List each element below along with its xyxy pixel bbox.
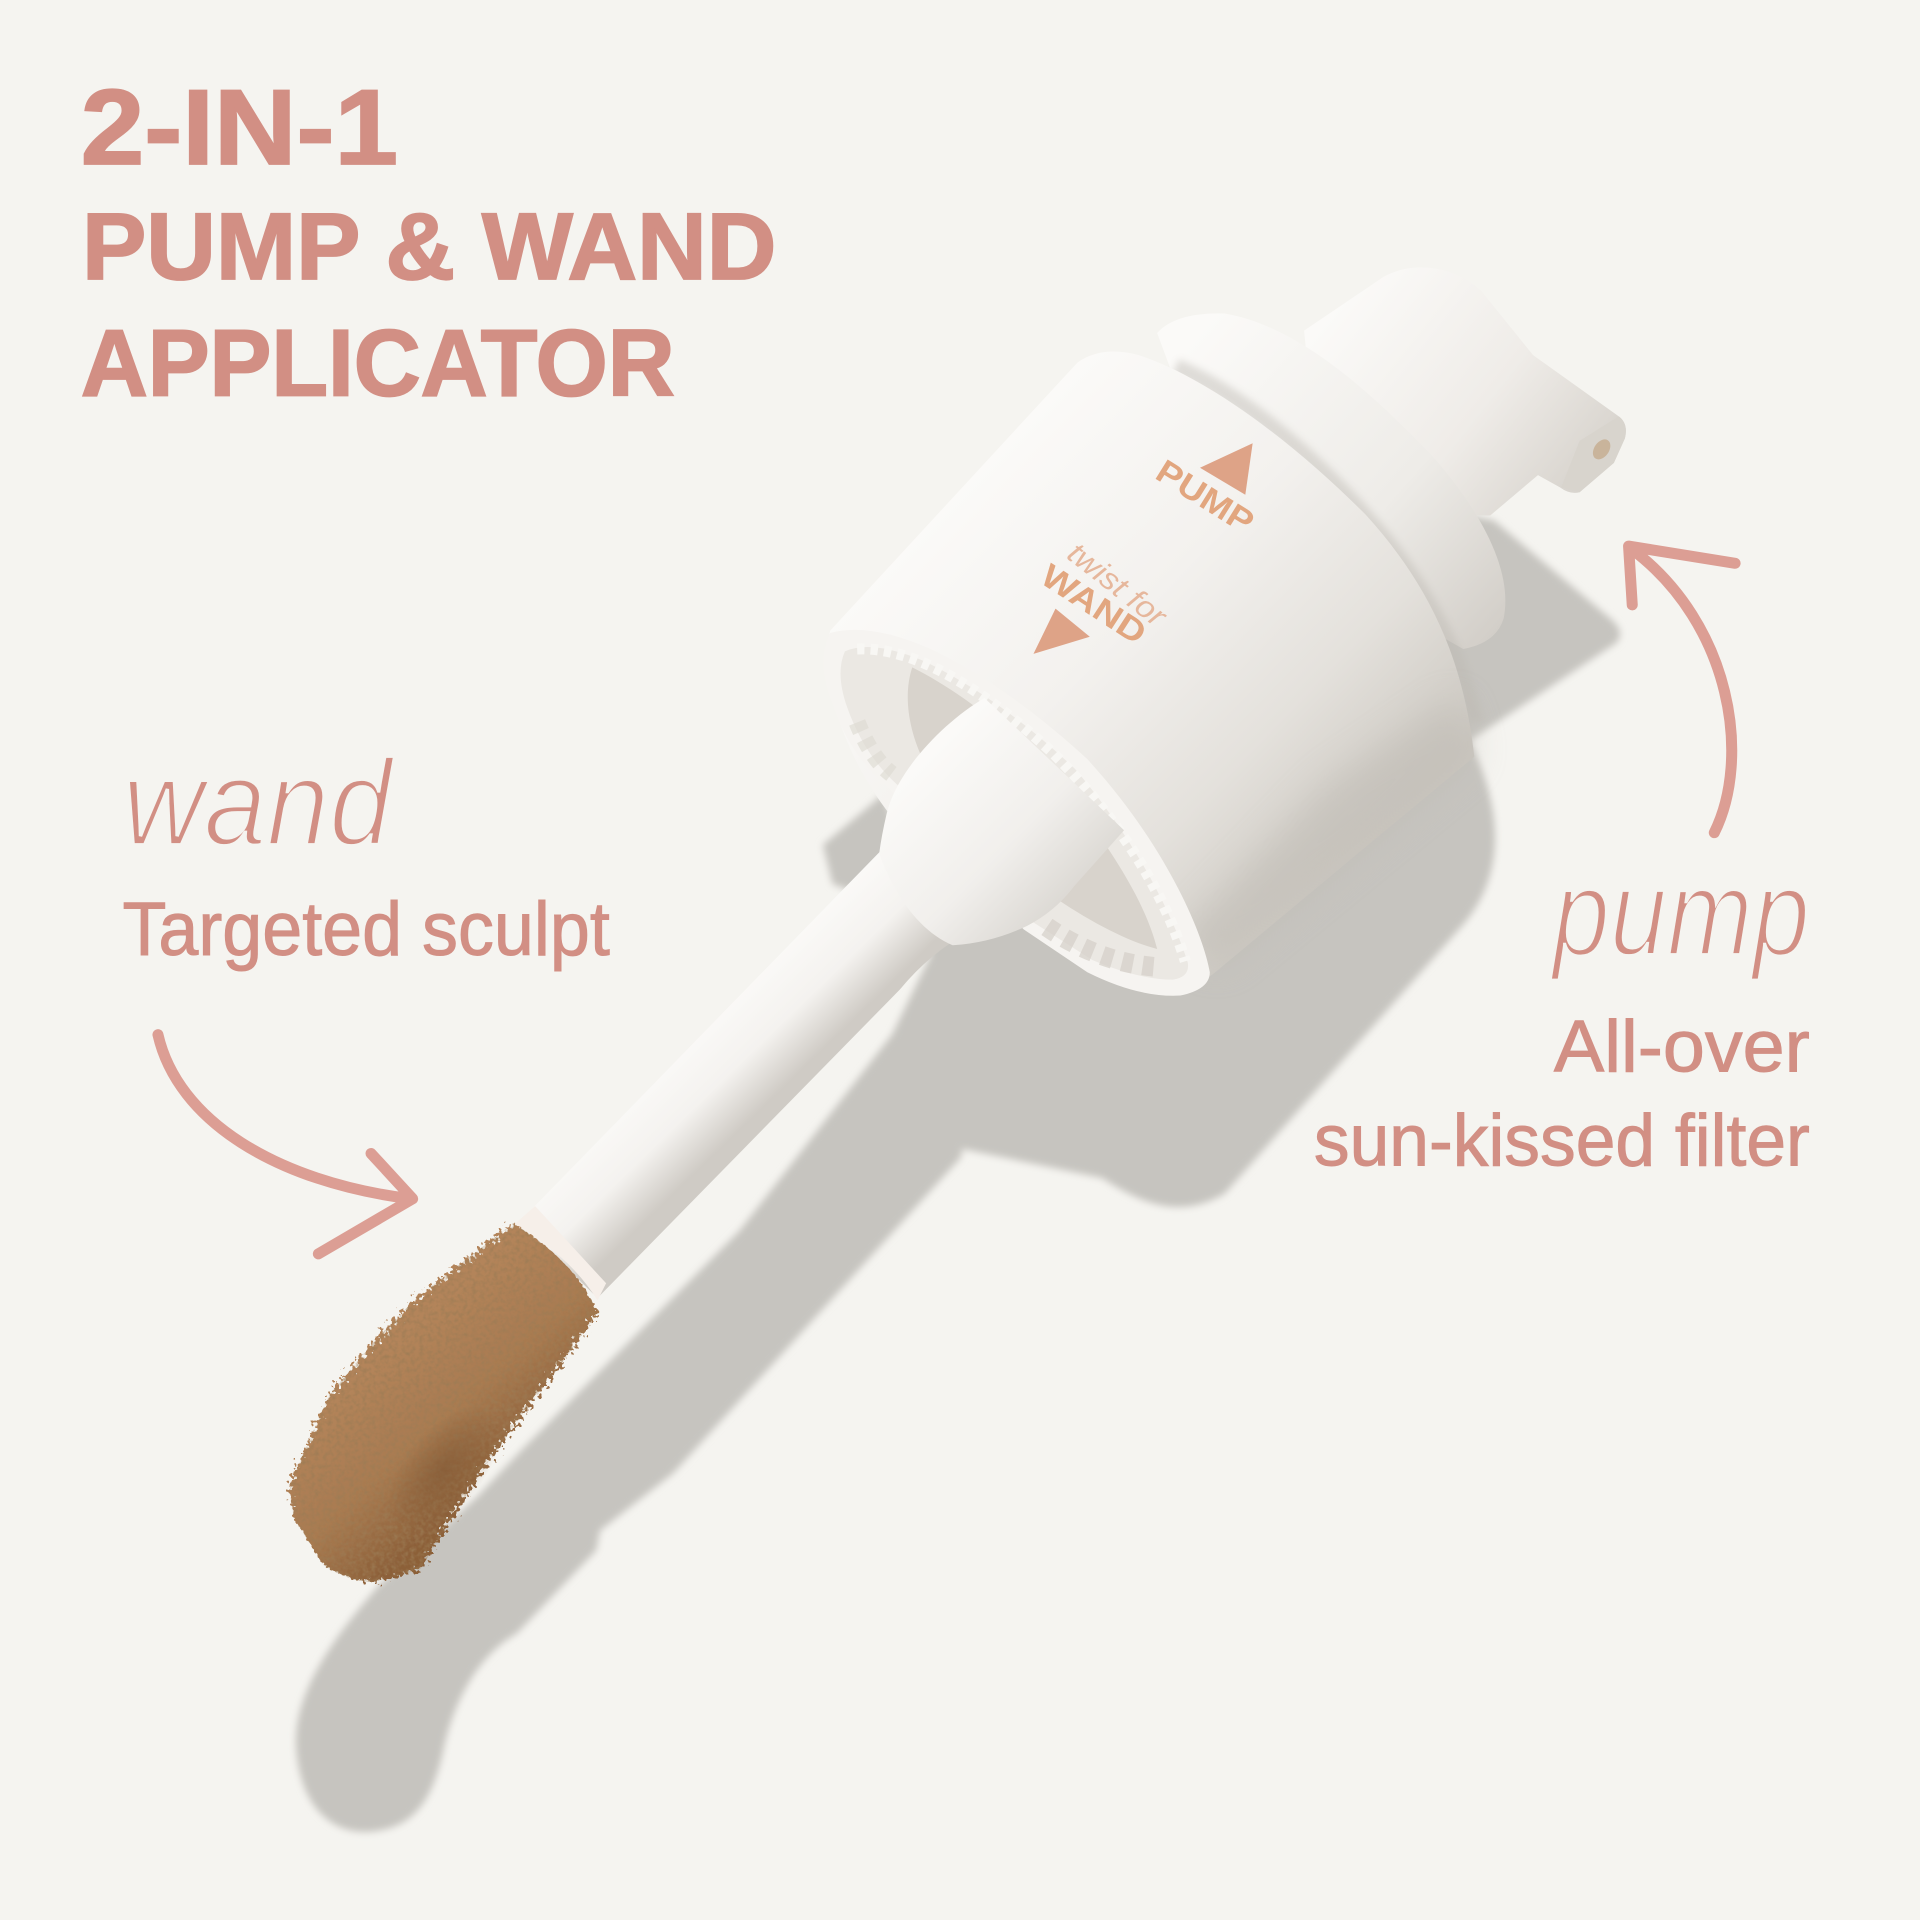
embossed label: twist for wand: WAND xyxy=(1034,557,1153,652)
wand stem xyxy=(519,845,980,1298)
soft shade on the lower body xyxy=(1176,698,1474,967)
pump head with nozzle xyxy=(1304,267,1626,516)
callout: pump: All-over xyxy=(1554,1004,1810,1087)
arrow: pump callout to pump head xyxy=(1629,546,1735,833)
callout: pump: sun-kissed filter xyxy=(1314,1099,1810,1182)
callout: pump xyxy=(1314,844,1810,1182)
darker fold on the sponge xyxy=(364,1386,522,1553)
title: APPLICATOR xyxy=(81,311,675,416)
wand neck and ball xyxy=(879,698,1124,945)
callout: wand: wand xyxy=(122,734,395,871)
front rim opening xyxy=(823,630,1210,996)
embossed label: pump: PUMP xyxy=(1149,453,1260,541)
shade where the body meets the collar xyxy=(1176,367,1476,722)
callout: pump: pump xyxy=(1549,844,1810,981)
main cylinder body xyxy=(828,352,1474,988)
cast shadow of the applicator xyxy=(296,490,1620,1832)
embossed label: twist for wand: twist for xyxy=(1061,536,1174,635)
sponge applicator tip xyxy=(290,1223,598,1582)
embossed label: twist for wand xyxy=(1033,536,1174,654)
pale collar at the tip of the stem xyxy=(514,1206,606,1300)
title: 2-IN-1 xyxy=(81,68,398,187)
title: PUMP & WAND xyxy=(82,194,776,299)
collar ring xyxy=(1157,313,1505,649)
callout: wand xyxy=(122,734,610,972)
product: pump and wand applicator xyxy=(290,267,1626,1582)
arrow: wand callout to sponge tip xyxy=(158,1035,413,1254)
callout: wand: Targeted sculpt xyxy=(122,887,610,972)
title xyxy=(81,68,776,416)
